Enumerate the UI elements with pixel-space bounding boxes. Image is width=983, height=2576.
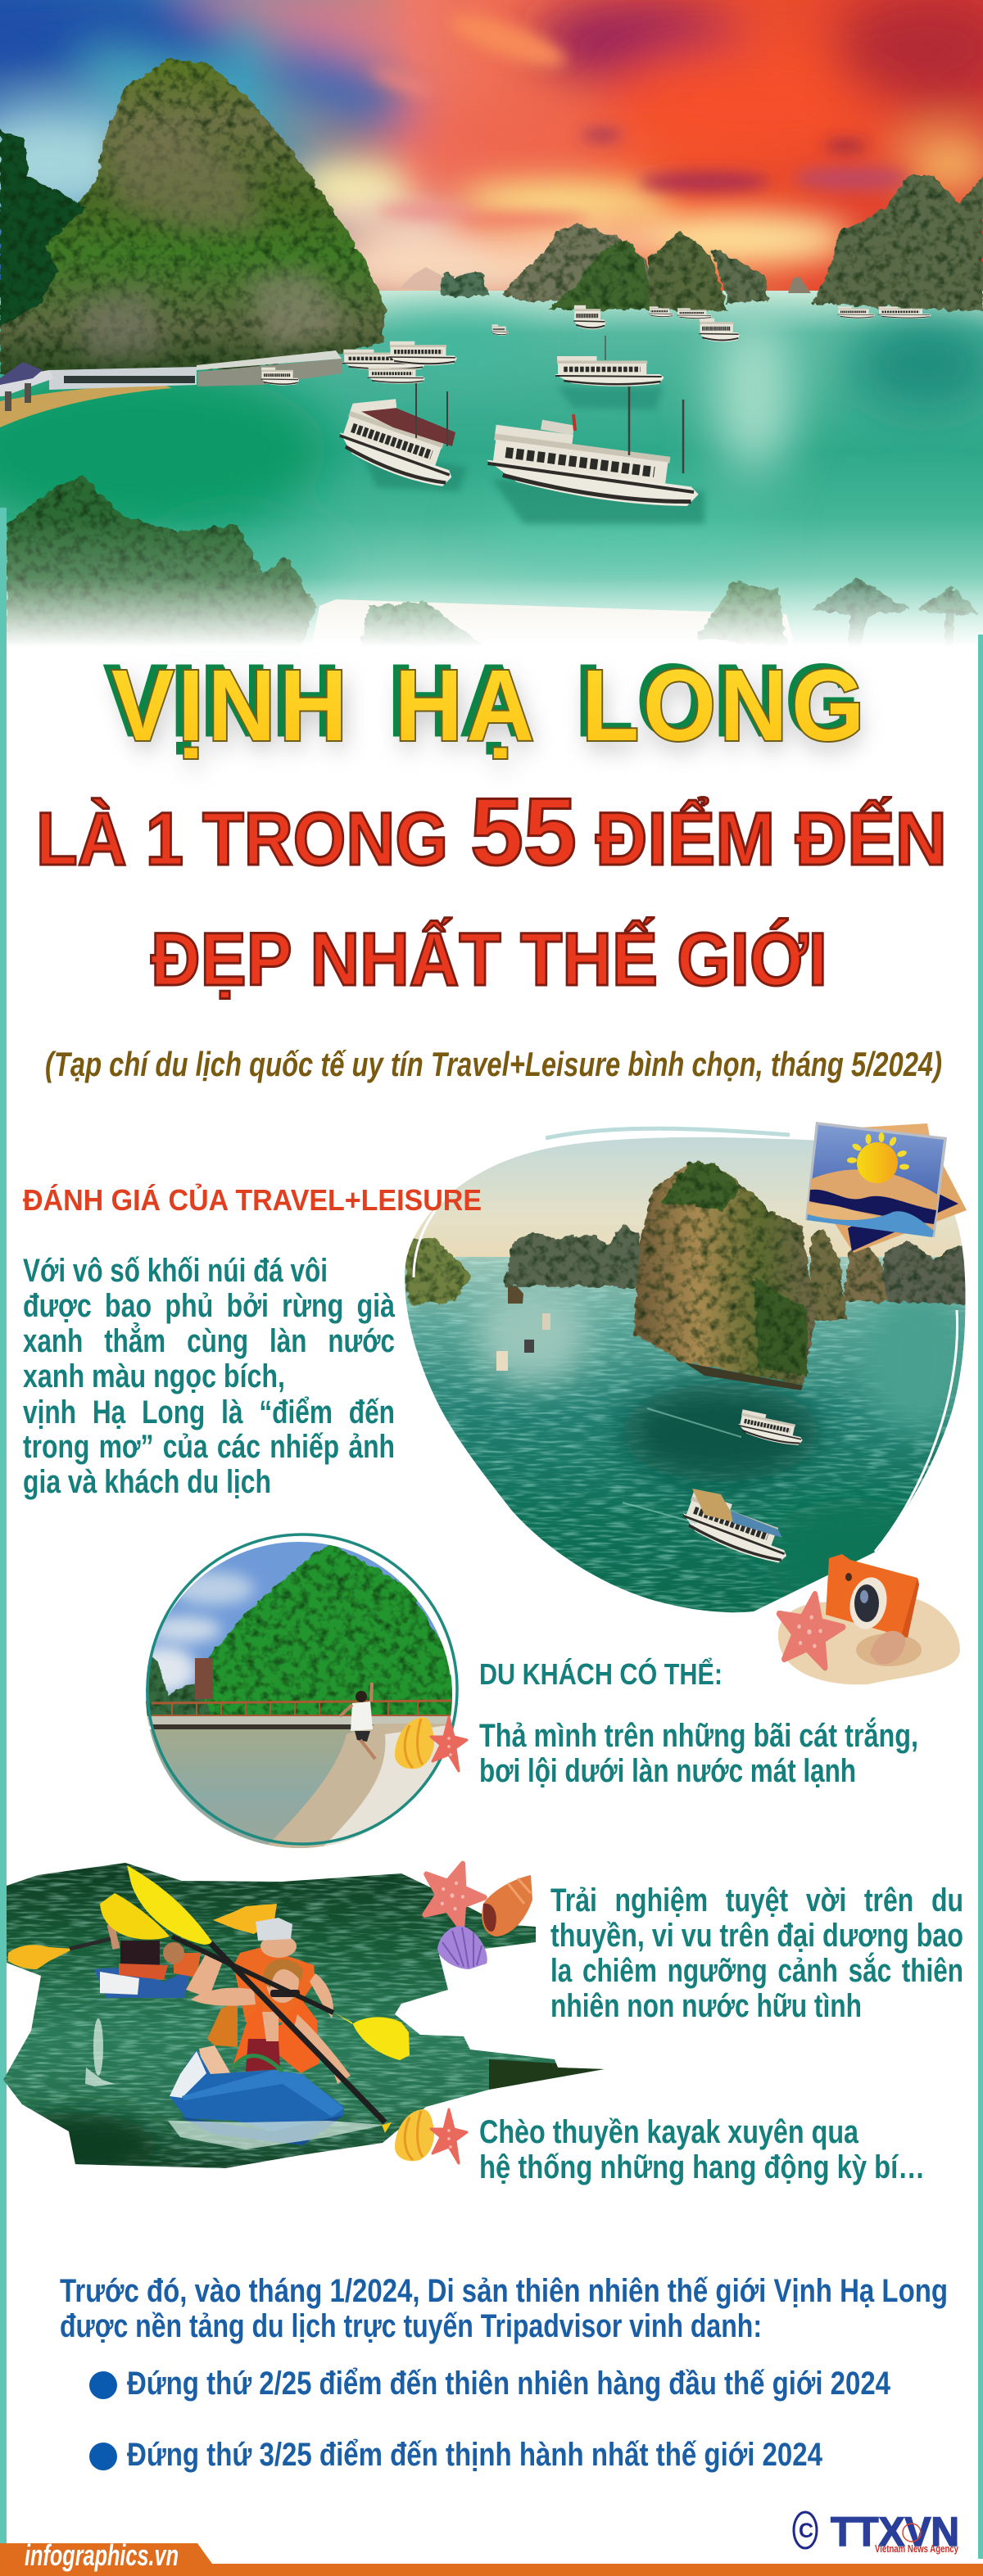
sky [0, 0, 983, 328]
decorative white and teal arcs [546, 1128, 790, 1138]
title: Vinh Ha Long: VỊNH HẠ LONG [115, 658, 868, 771]
footer bar: infographics.vn [25, 2538, 179, 2572]
bullet 2: Đứng thứ 3/25 điểm đến thịnh hành nhất thế giới 2024 [127, 2437, 823, 2473]
headline line: La 1 trong 55 diem den: LÀ 1 TRONG [36, 798, 448, 881]
rear paddler [186, 1918, 333, 2047]
water reflections under boats [360, 386, 704, 524]
main limestone karst [0, 58, 386, 373]
jumping person [340, 1683, 375, 1759]
icon: camera on sand [772, 1554, 960, 1684]
headline line: La 1 trong 55 diem den [36, 778, 947, 885]
main rock [633, 1162, 815, 1390]
title: Vinh Ha Long: VỊNH HẠ LONG [111, 650, 868, 762]
headline line: Dep nhat the gioi: ĐẸP NHẤT THẾ GIỚI [151, 917, 827, 1001]
text: kayak through caves: Chèo thuyền kayak xuyên qua [479, 2114, 859, 2150]
background paddles [8, 1904, 277, 1969]
railing and bridge [147, 1700, 452, 1729]
title: Vinh Ha Long: VỊNH HẠ LONG [104, 645, 863, 757]
icon: shell and starfish near kayak text [395, 2109, 467, 2163]
text: kayak through caves [479, 2114, 925, 2185]
background kayakers [94, 1924, 201, 1998]
white fade at hero bottom [0, 516, 983, 651]
text: cruise experience [550, 1882, 963, 2024]
main blob photo of the bay [393, 1122, 983, 1625]
logo: TTXVN: C [799, 2520, 813, 2542]
yellow paddles and shaft [100, 1865, 392, 2133]
big boat [483, 386, 704, 512]
foliage left edge [0, 129, 86, 328]
round beach photo [131, 1534, 467, 1860]
far islands [401, 1224, 967, 1321]
white splash [85, 2018, 115, 2086]
logo: TTXVN: TTXVN [831, 2509, 959, 2555]
paragraph: Tripadvisor [60, 2273, 948, 2344]
icon: purple scallop [437, 1926, 487, 1969]
lower yellow paddle blade [334, 2013, 410, 2060]
paragraph: Travel+Leisure review [23, 1253, 396, 1500]
kayak hull [170, 2050, 344, 2145]
icon: starfish and spiral shell [414, 1852, 532, 1937]
heading: Danh gia cua Travel+Leisure: ĐÁNH GIÁ CỦA TRAVEL+LEISURE [23, 1182, 482, 1217]
blob sea [393, 1257, 983, 1625]
kayak photo [0, 1859, 614, 2178]
icon: shell and starfish on beach photo [395, 1717, 467, 1771]
footer bar [0, 2538, 983, 2576]
hero photo: Ha Long Bay at sunset [0, 0, 983, 651]
paragraph: Travel+Leisure review: xanh thẳm cùng làn nước [23, 1321, 395, 1359]
text: white sand beaches [479, 1716, 918, 1789]
legs [199, 2045, 231, 2076]
distant boats [260, 305, 931, 386]
water [149, 1729, 384, 1848]
text: white sand beaches: bơi lội dưới làn nước mát lạnh [479, 1753, 856, 1789]
icon: stacked photo cards with sun [805, 1122, 967, 1253]
sea [0, 291, 983, 647]
headline line: La 1 trong 55 diem den: ĐIỂM ĐẾN [596, 796, 947, 881]
paragraph: Travel+Leisure review: Với vô số khối núi đá vôi [23, 1253, 328, 1289]
second boat [333, 377, 464, 492]
distant islands [400, 175, 983, 311]
side borders [0, 508, 983, 2559]
blob boats [496, 1313, 806, 1567]
paragraph: Travel+Leisure review: được bao phủ bởi rừng già [23, 1288, 396, 1324]
paragraph: Travel+Leisure review: xanh màu ngọc bích, [23, 1358, 285, 1394]
foreground palms and white dock [7, 475, 979, 647]
text: cruise experience: nhiên non nước hữu tình [550, 1988, 862, 2024]
paragraph: Tripadvisor: được nền tảng du lịch trực tuyến Tripadvisor vinh danh: [60, 2308, 762, 2344]
jetty and pier [0, 350, 342, 427]
sand [268, 1724, 446, 1848]
blob sky [405, 1137, 965, 1274]
green hill [188, 1543, 459, 1720]
paragraph: Travel+Leisure review: gia và khách du lịch [23, 1464, 271, 1500]
white bow spray [168, 2121, 385, 2149]
paragraph: Travel+Leisure review: trong mơ” của các nhiếp ảnh [23, 1429, 395, 1465]
paragraph: Travel+Leisure review: vịnh Hạ Long là “điểm đến [23, 1394, 395, 1430]
cruise boats [260, 305, 931, 512]
headline line: La 1 trong 55 diem den: 55 [470, 778, 577, 885]
teal outline circle [147, 1534, 457, 1844]
green water [0, 1859, 614, 2178]
beach sky [139, 1539, 467, 1720]
front paddler [191, 1959, 351, 2084]
heading: Du khach co the: DU KHÁCH CÓ THỂ: [479, 1656, 723, 1691]
